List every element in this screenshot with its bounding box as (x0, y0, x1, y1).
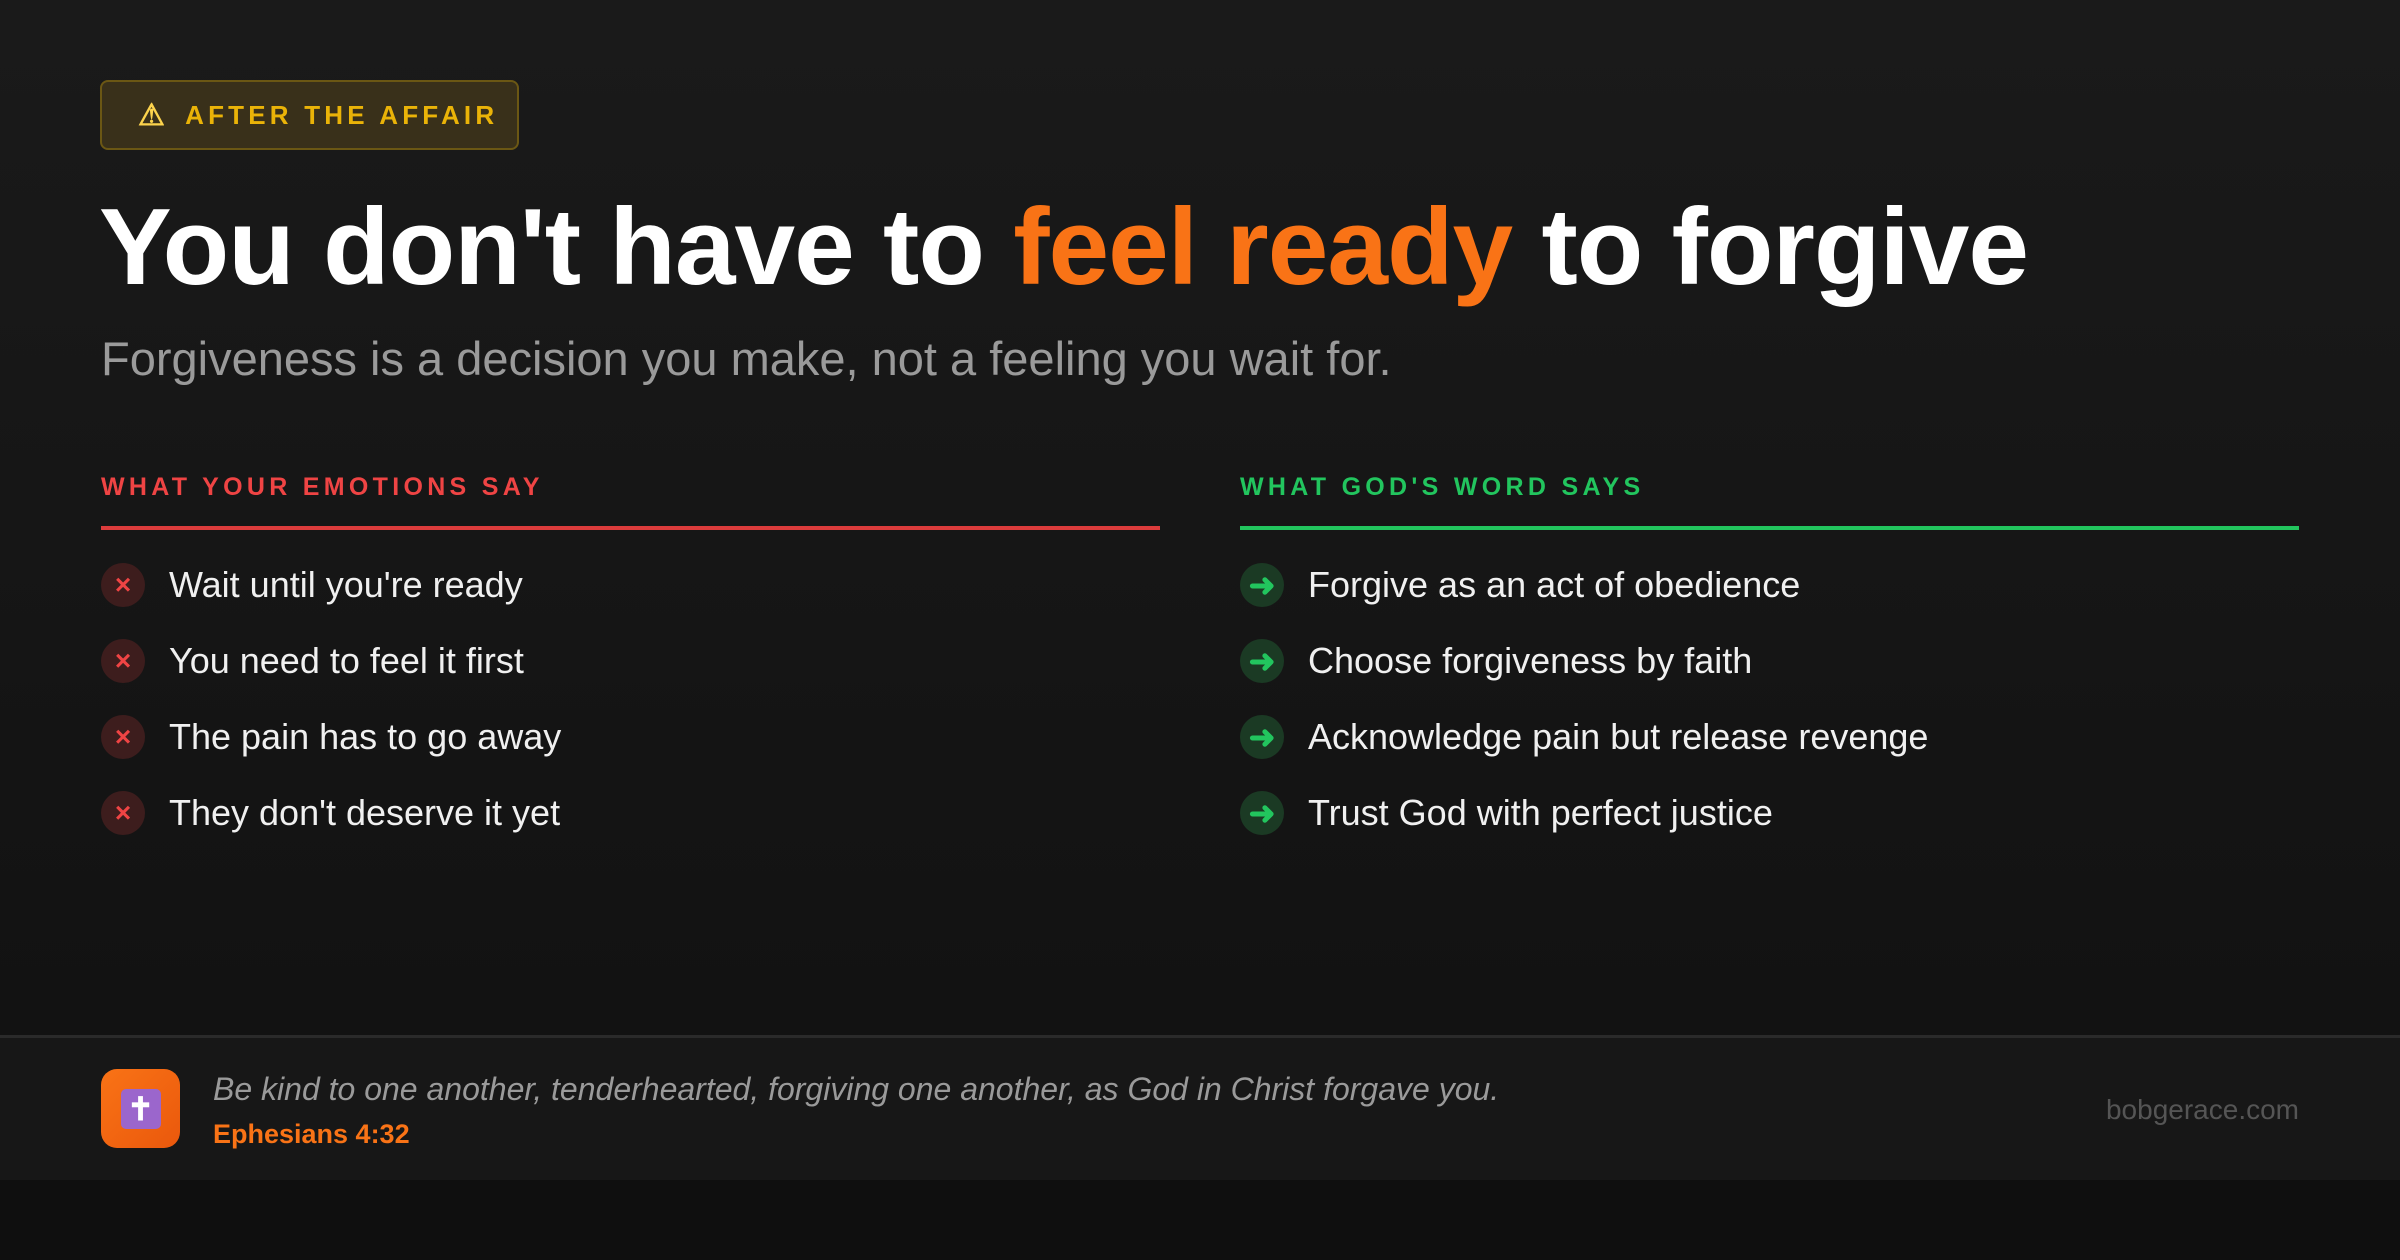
item 3: Acknowledge pain but release revenge (1308, 716, 1928, 757)
heading: god's word: WHAT GOD'S WORD SAYS (1240, 473, 1644, 501)
heading: god's word (1240, 473, 2299, 530)
item 2: You need to feel it first (169, 640, 524, 681)
footer (0, 1035, 2400, 1180)
quote: Be kind to one another, tenderhearted, forgiving one another, as God in Christ forgave you. (213, 1071, 1499, 1107)
item 4: × (115, 797, 131, 828)
heading: emotions: WHAT YOUR EMOTIONS SAY (101, 473, 544, 501)
item 4: ➜ (1249, 795, 1275, 831)
panel: emotions (101, 473, 1160, 835)
item 1: Forgive as an act of obedience (1308, 564, 1800, 605)
item 2: ➜ (1249, 643, 1275, 679)
reference: Ephesians 4:32 (213, 1119, 410, 1149)
item 1: × (115, 569, 131, 600)
heading: emotions (101, 473, 1160, 530)
panel: god's word (1240, 473, 2299, 835)
title: You don't have to feel ready to forgive (99, 186, 2028, 308)
item 3: × (115, 721, 131, 752)
item 3: ➜ (1249, 719, 1275, 755)
icon: cross (101, 1069, 180, 1148)
item 1: Wait until you're ready (169, 564, 523, 605)
item 2: × (115, 645, 131, 676)
badge (100, 80, 519, 150)
item 2: Choose forgiveness by faith (1308, 640, 1752, 681)
item 1: ➜ (1249, 567, 1275, 603)
icon: cross: ✝ (127, 1090, 154, 1126)
badge: AFTER THE AFFAIR (185, 100, 498, 130)
item 4: They don't deserve it yet (169, 792, 560, 833)
item 3: The pain has to go away (169, 716, 561, 757)
item 4: Trust God with perfect justice (1308, 792, 1773, 833)
badge: ⚠ (138, 98, 169, 132)
subtitle: Forgiveness is a decision you make, not a feeling you wait for. (101, 332, 1392, 385)
site: bobgerace.com (2106, 1094, 2299, 1125)
